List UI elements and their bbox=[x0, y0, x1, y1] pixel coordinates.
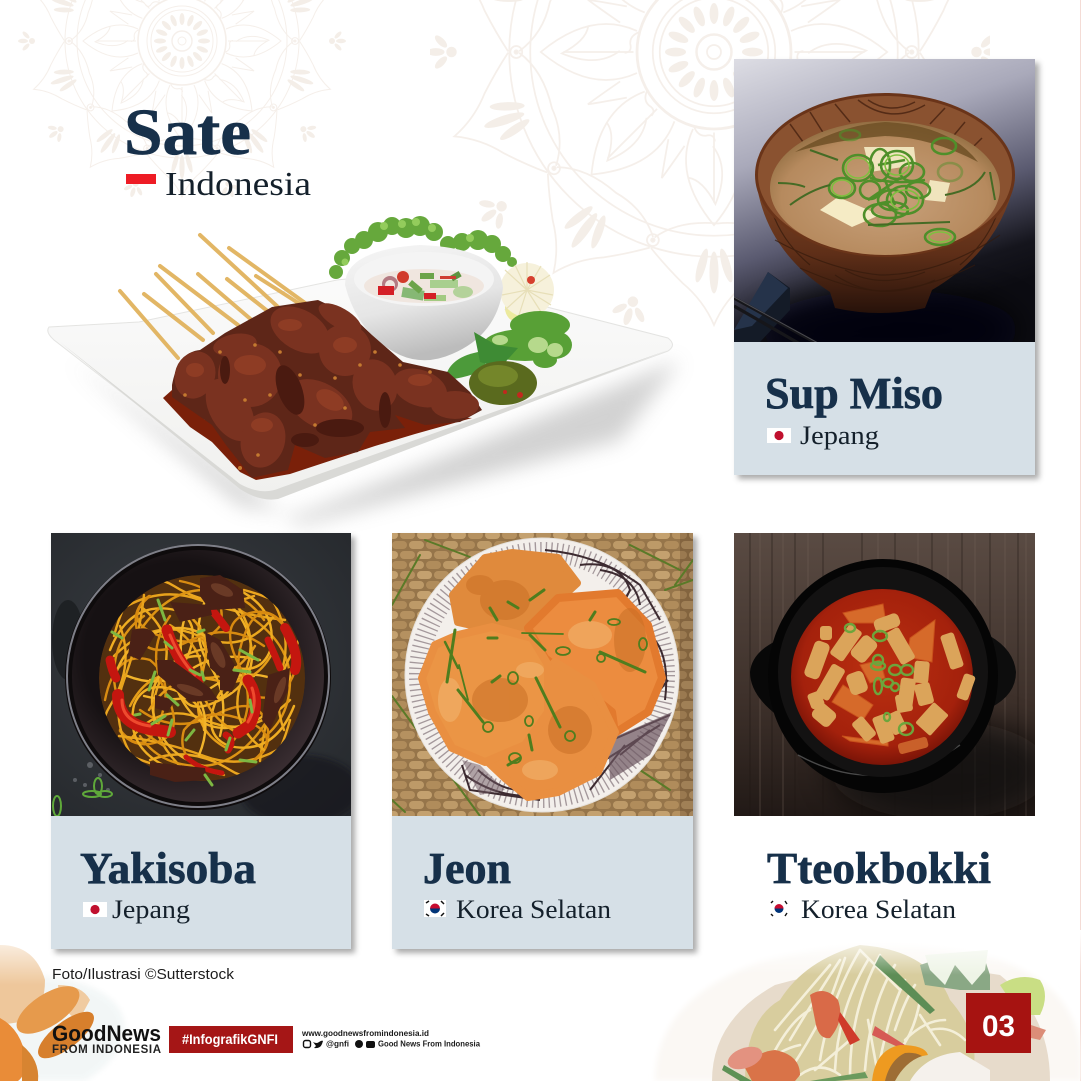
lettuce bbox=[329, 216, 517, 279]
hashtag badge bbox=[169, 1026, 293, 1053]
heading: Yakisoba: Yakisoba bbox=[80, 844, 256, 893]
title: Sate: Sate bbox=[124, 96, 251, 169]
beef strips bbox=[128, 575, 290, 782]
sauce pool bbox=[163, 390, 472, 480]
country label: Korea Selatan: Korea Selatan bbox=[456, 895, 611, 924]
dipping sauce garnish bbox=[378, 271, 473, 301]
panel: Tteokbokki card bbox=[734, 533, 1050, 924]
icon: Indonesian flag bbox=[126, 174, 156, 184]
photo: jeon pancakes bbox=[392, 533, 693, 816]
panel: Jeon card bbox=[392, 533, 697, 953]
noodles bbox=[99, 575, 305, 781]
mandala: top centre background ornament bbox=[430, 0, 990, 327]
mint and sambal bbox=[445, 352, 488, 380]
logo: GoodNews From Indonesia bbox=[52, 1021, 161, 1056]
hashtag badge: #InfografikGNFI bbox=[182, 1032, 278, 1047]
title: Sate bbox=[124, 96, 311, 203]
website and social handles: www.goodnewsfromindonesia.id bbox=[301, 1029, 429, 1038]
flower garnish bbox=[505, 293, 535, 323]
fish cakes bbox=[832, 604, 935, 746]
tofu bbox=[864, 147, 916, 172]
mandala: top left background ornament bbox=[18, 0, 346, 198]
scallions bbox=[845, 624, 913, 735]
page number: 03 bbox=[982, 1010, 1015, 1043]
website and social handles: Good News From Indonesia bbox=[378, 1040, 481, 1048]
country label: Jepang: Jepang bbox=[800, 421, 879, 450]
icon: Japan flag bbox=[767, 428, 791, 443]
green onions bbox=[483, 311, 572, 368]
panel: Sup Miso card bbox=[734, 59, 1039, 479]
country label: Indonesia: Indonesia bbox=[165, 166, 311, 203]
patterned plate bbox=[405, 538, 679, 812]
page number bbox=[966, 993, 1031, 1053]
pot handles bbox=[750, 642, 774, 713]
icon: instagram bbox=[304, 1040, 310, 1048]
scallions bbox=[112, 600, 258, 785]
icon: Japan flag bbox=[83, 902, 107, 917]
skewers bbox=[120, 235, 314, 358]
rice cakes bbox=[803, 612, 976, 755]
country label: Korea Selatan: Korea Selatan bbox=[801, 895, 956, 924]
photo credit: Foto/Ilustrasi ©Sutterstock bbox=[52, 966, 235, 983]
country label: Jepang: Jepang bbox=[112, 895, 190, 924]
heading: Tteokbokki: Tteokbokki bbox=[767, 844, 991, 893]
bottom left faded food photo bbox=[0, 945, 124, 1081]
chopstick rest and chopsticks bbox=[734, 272, 790, 342]
photo: yakisoba bowl bbox=[51, 533, 360, 825]
heading: Sup Miso: Sup Miso bbox=[765, 369, 943, 418]
green onions bbox=[829, 130, 962, 245]
plate bbox=[48, 268, 673, 498]
bottom right faded salad photo bbox=[657, 930, 1081, 1081]
photo: tteokbokki pot bbox=[734, 533, 1050, 820]
icon: twitter bbox=[313, 1041, 323, 1048]
logo: GoodNews From Indonesia: FROM INDONESIA bbox=[52, 1044, 161, 1056]
photo: miso soup bbox=[734, 59, 1035, 370]
loose scallions bbox=[53, 778, 112, 816]
bowl bbox=[345, 245, 503, 360]
red peppers bbox=[110, 610, 296, 773]
meat bbox=[172, 300, 482, 478]
hero photo: sate plate bbox=[48, 216, 680, 525]
icon: South Korea flag bbox=[424, 900, 446, 917]
icon: facebook bbox=[355, 1040, 363, 1048]
icon: South Korea flag bbox=[769, 900, 789, 917]
chives bbox=[445, 590, 645, 765]
logo: GoodNews From Indonesia: GoodNews bbox=[52, 1021, 161, 1046]
website and social handles bbox=[301, 1029, 481, 1048]
pancakes bbox=[422, 553, 662, 797]
icon: youtube bbox=[366, 1041, 375, 1048]
website and social handles: @gnfi bbox=[326, 1040, 349, 1048]
panel: Yakisoba card bbox=[51, 533, 360, 953]
salad strands bbox=[755, 950, 965, 1075]
heading: Jeon: Jeon bbox=[423, 844, 511, 893]
